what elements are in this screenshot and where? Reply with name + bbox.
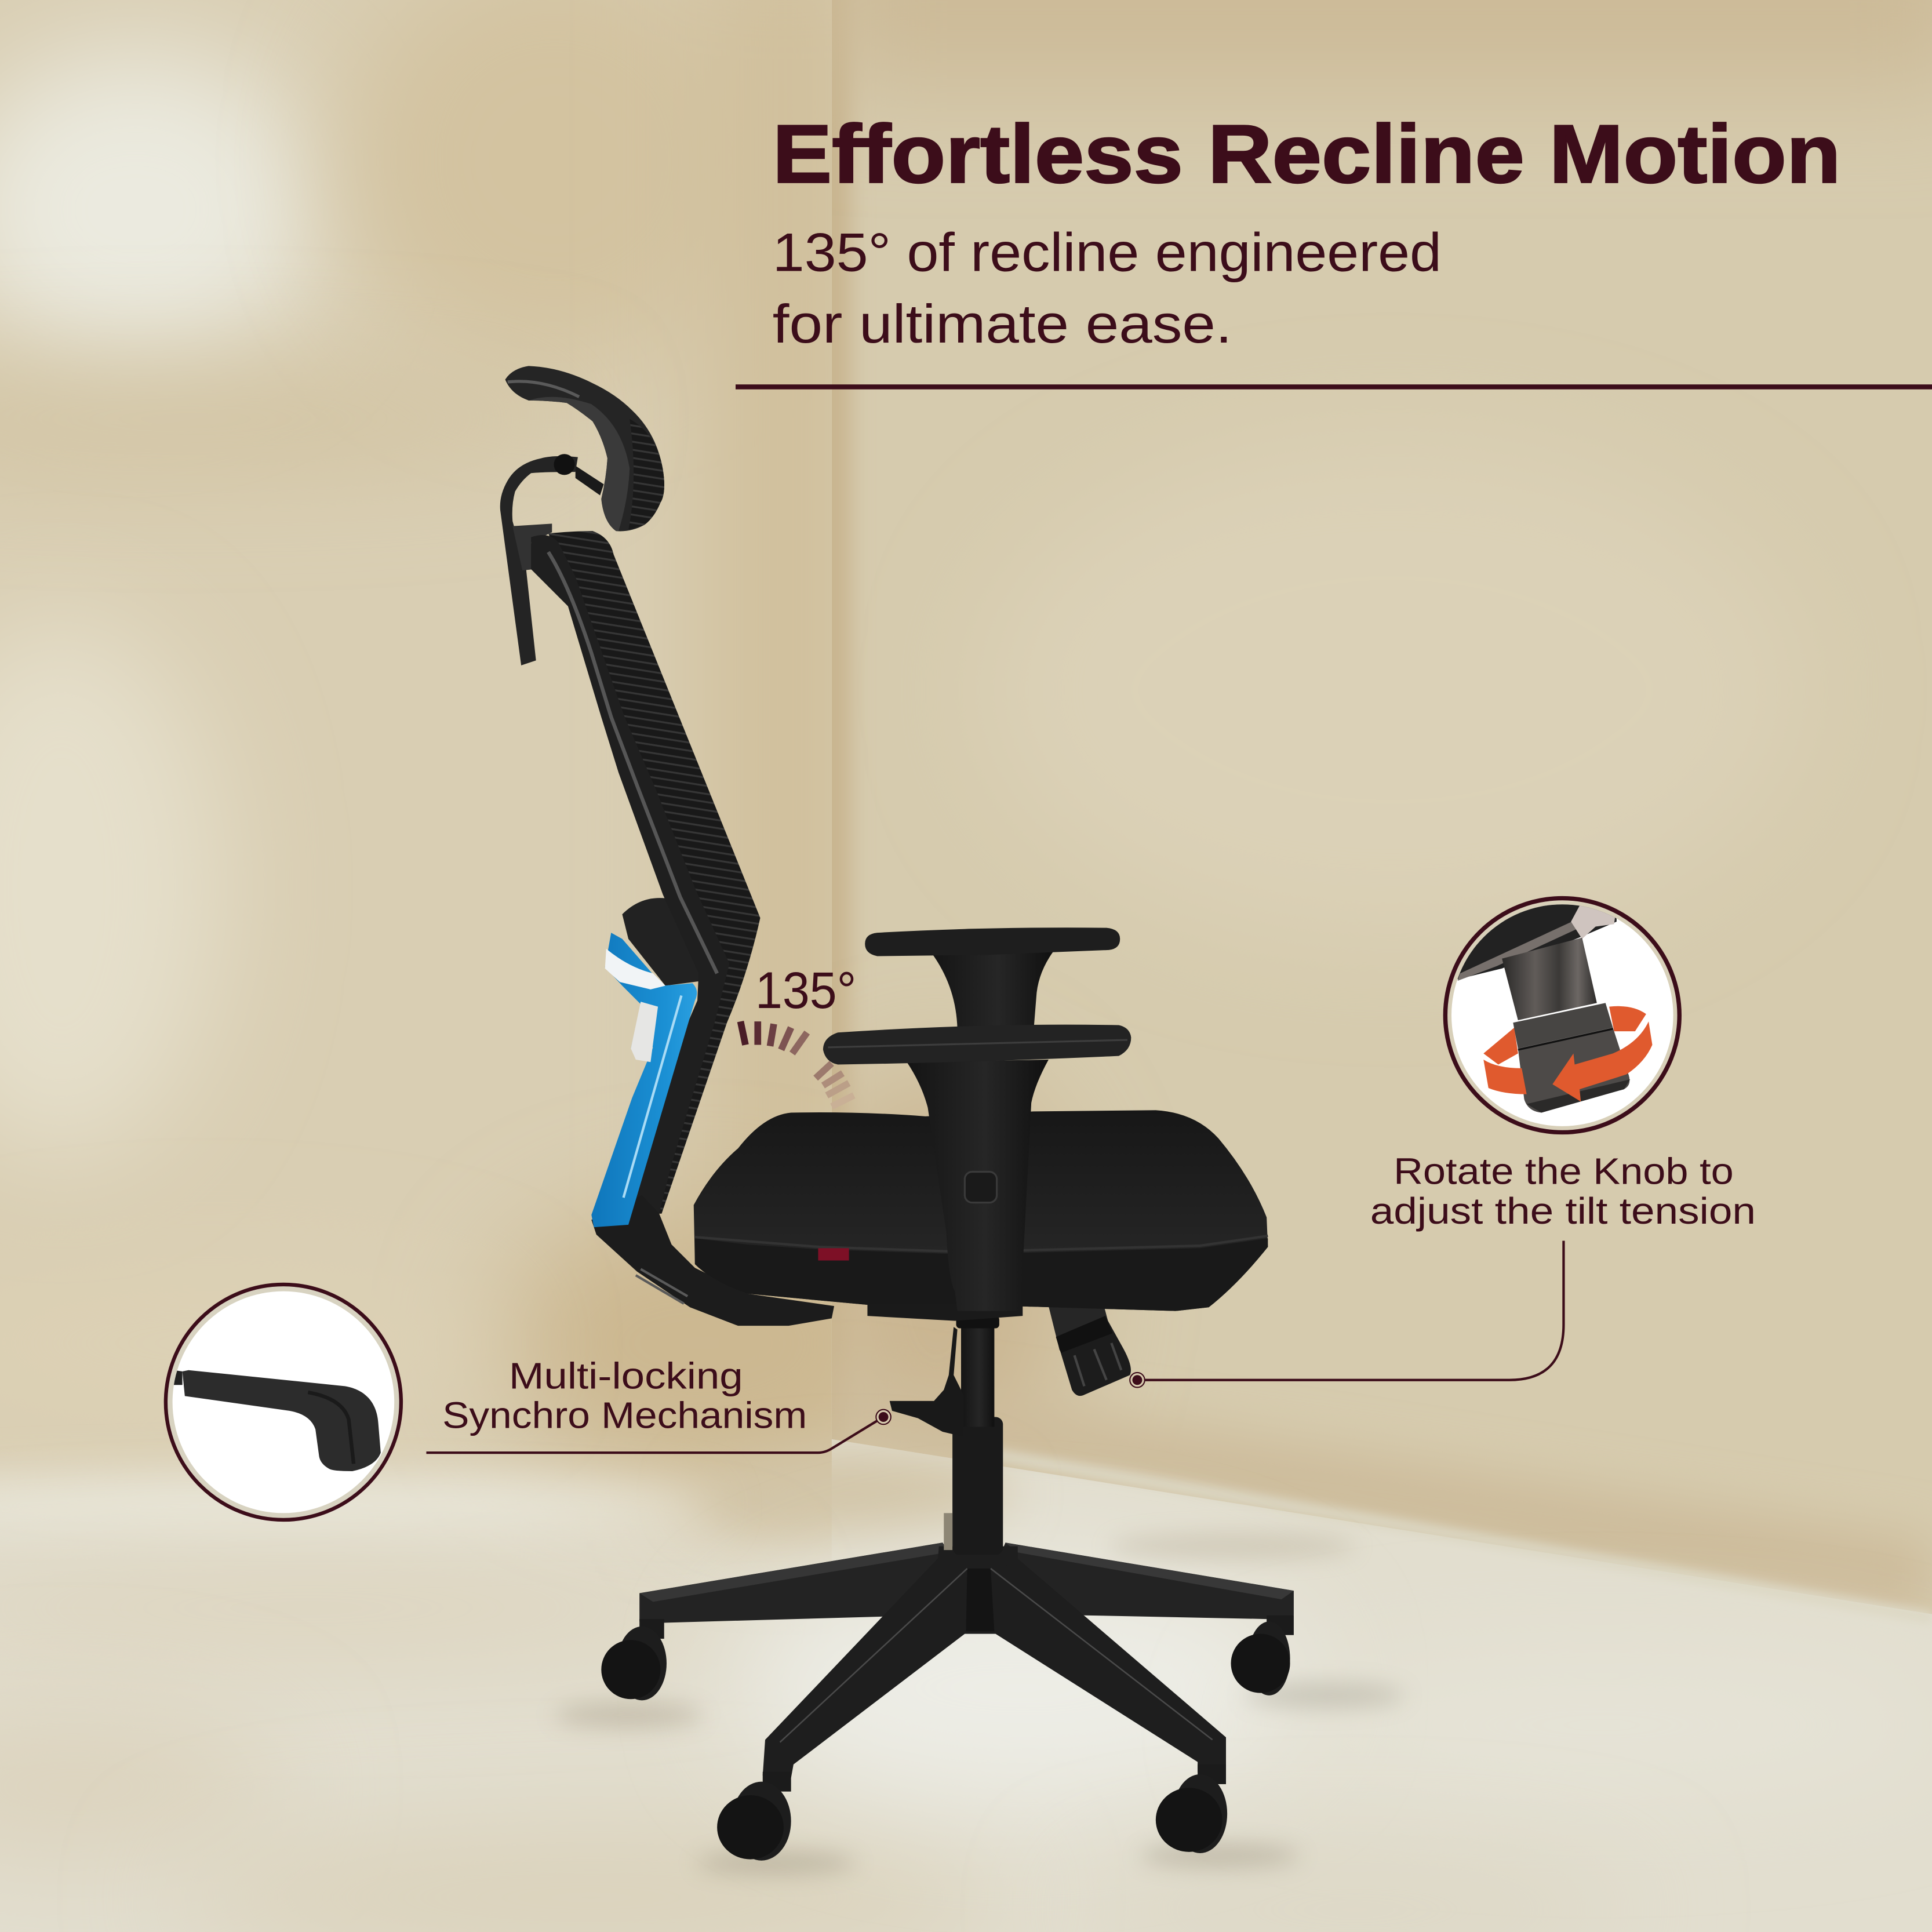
header rule [736, 384, 1932, 390]
callout: tilt tension [1370, 1151, 1756, 1232]
callout: synchro mechanism: Synchro Mechanism [442, 1395, 807, 1436]
headrest [505, 366, 664, 531]
inset: recline lever [166, 1285, 401, 1520]
backrest frame [531, 535, 729, 1232]
leader line: tilt tension [1130, 1241, 1563, 1387]
chair [500, 366, 1294, 1861]
under-seat mechanism [867, 1304, 1023, 1321]
tilt knob [1049, 1306, 1131, 1396]
backrest mesh [548, 531, 761, 1214]
subtitle [773, 222, 1442, 354]
seat label [818, 1248, 849, 1261]
gas cylinder [944, 1316, 1003, 1555]
headrest bracket [500, 454, 604, 665]
orange arrow back [1483, 1006, 1646, 1065]
lumbar support [622, 898, 712, 986]
lower frame [591, 1195, 834, 1326]
seat cushion [694, 1110, 1268, 1311]
title: Effortless Recline Motion [773, 108, 1841, 201]
recline angle arc [741, 1021, 854, 1107]
blue lumbar shell [591, 933, 697, 1227]
callout: synchro mechanism [442, 1355, 807, 1436]
subtitle: 135° of recline engineered [773, 222, 1442, 283]
135 degree label: 135° [755, 961, 856, 1019]
lower armrest [823, 1025, 1131, 1311]
frame highlight [548, 552, 717, 973]
callout: tilt tension: adjust the tilt tension [1370, 1190, 1756, 1232]
lower frame vents [636, 1269, 687, 1304]
orange arrow front [1552, 1021, 1652, 1101]
subtitle: for ultimate ease. [773, 293, 1232, 354]
casters [601, 1616, 1294, 1861]
callout: synchro mechanism: Multi-locking [509, 1355, 743, 1397]
leader line: synchro mechanism [426, 1410, 891, 1453]
callout: tilt tension: Rotate the Knob to [1393, 1151, 1734, 1192]
lever [890, 1327, 963, 1436]
upper armrest [865, 927, 1120, 1029]
chair base [639, 1542, 1294, 1779]
inset: tilt knob [1445, 893, 1679, 1132]
